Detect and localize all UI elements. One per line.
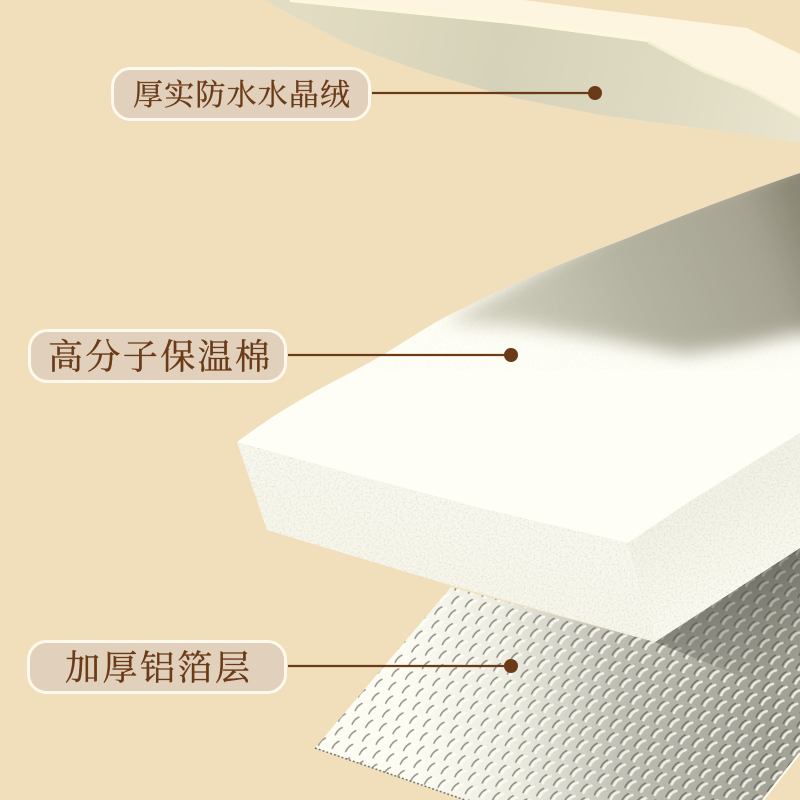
leader dot (504, 348, 518, 362)
callout: aluminium foil (28, 642, 518, 692)
top layer velvet side face (265, 0, 800, 143)
foam right face (628, 433, 800, 642)
foam top surface (237, 173, 800, 543)
callout: crystal velvet (112, 68, 602, 120)
foam front face (237, 442, 655, 642)
foam cast shadow (442, 173, 800, 368)
label pill (30, 330, 286, 382)
panel: aluminium foil layer (315, 548, 800, 800)
foil bottom left edge (315, 748, 465, 800)
label pill (28, 642, 286, 692)
leader dot (504, 659, 518, 673)
label text: 厚实防水水晶绒 (133, 79, 350, 112)
label text: 加厚铝箔层 (65, 649, 250, 688)
leader line (288, 665, 511, 667)
foam grain texture (230, 430, 800, 645)
foil shadow below foam (655, 548, 800, 700)
foil base (315, 548, 800, 800)
foil embossed texture (315, 548, 800, 800)
top layer highlighted edge (290, 0, 648, 40)
leader line (288, 354, 511, 356)
leader dot (588, 86, 602, 100)
panel: top layer crystal velvet (265, 0, 800, 143)
label pill (112, 68, 370, 120)
top layer stitched edge (648, 42, 800, 117)
top layer upper surface (290, 0, 800, 117)
panel: polymer insulation foam (230, 150, 800, 645)
callout: polymer insulation (30, 330, 518, 382)
foil bottom right edge (763, 753, 800, 800)
label text: 高分子保温棉 (48, 338, 270, 377)
leader line (372, 92, 595, 94)
